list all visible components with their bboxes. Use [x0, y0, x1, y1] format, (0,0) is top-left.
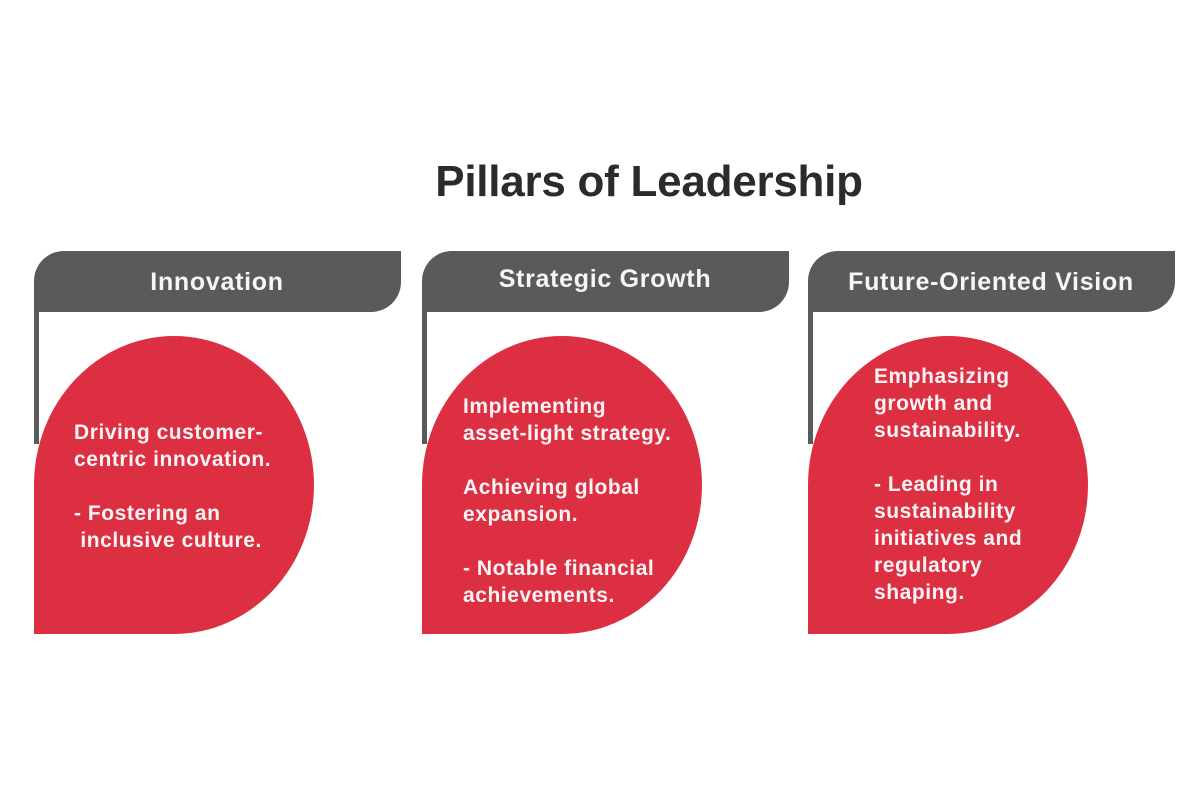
header: future-oriented vision	[808, 251, 1174, 312]
panel: future-oriented vision	[808, 251, 1175, 634]
header: innovation	[34, 251, 400, 312]
title: Pillars of Leadership	[435, 157, 863, 206]
blob: innovation	[34, 336, 314, 634]
heading: strategic growth: Strategic Growth	[499, 265, 711, 293]
blob: strategic growth	[422, 336, 702, 634]
header: strategic growth	[422, 251, 788, 312]
heading: innovation: Innovation	[150, 268, 284, 296]
panel: innovation	[34, 251, 401, 634]
connector line: strategic growth	[422, 301, 426, 444]
text: strategic growth: Implementing asset-light strategy. Achieving global expansion. - Notable financial achievements.	[463, 395, 671, 607]
text: future-oriented vision: Emphasizing growth and sustainability. - Leading in sustainability initiatives and regulatory shaping.	[874, 365, 1022, 604]
blob: future-oriented vision	[808, 336, 1088, 634]
connector line: innovation	[34, 301, 38, 444]
connector line: future-oriented vision	[808, 301, 812, 444]
panel: strategic growth	[422, 251, 789, 634]
text: innovation: Driving customer- centric innovation. - Fostering an inclusive culture.	[74, 421, 271, 552]
heading: future-oriented vision: Future-Oriented Vision	[848, 268, 1134, 296]
